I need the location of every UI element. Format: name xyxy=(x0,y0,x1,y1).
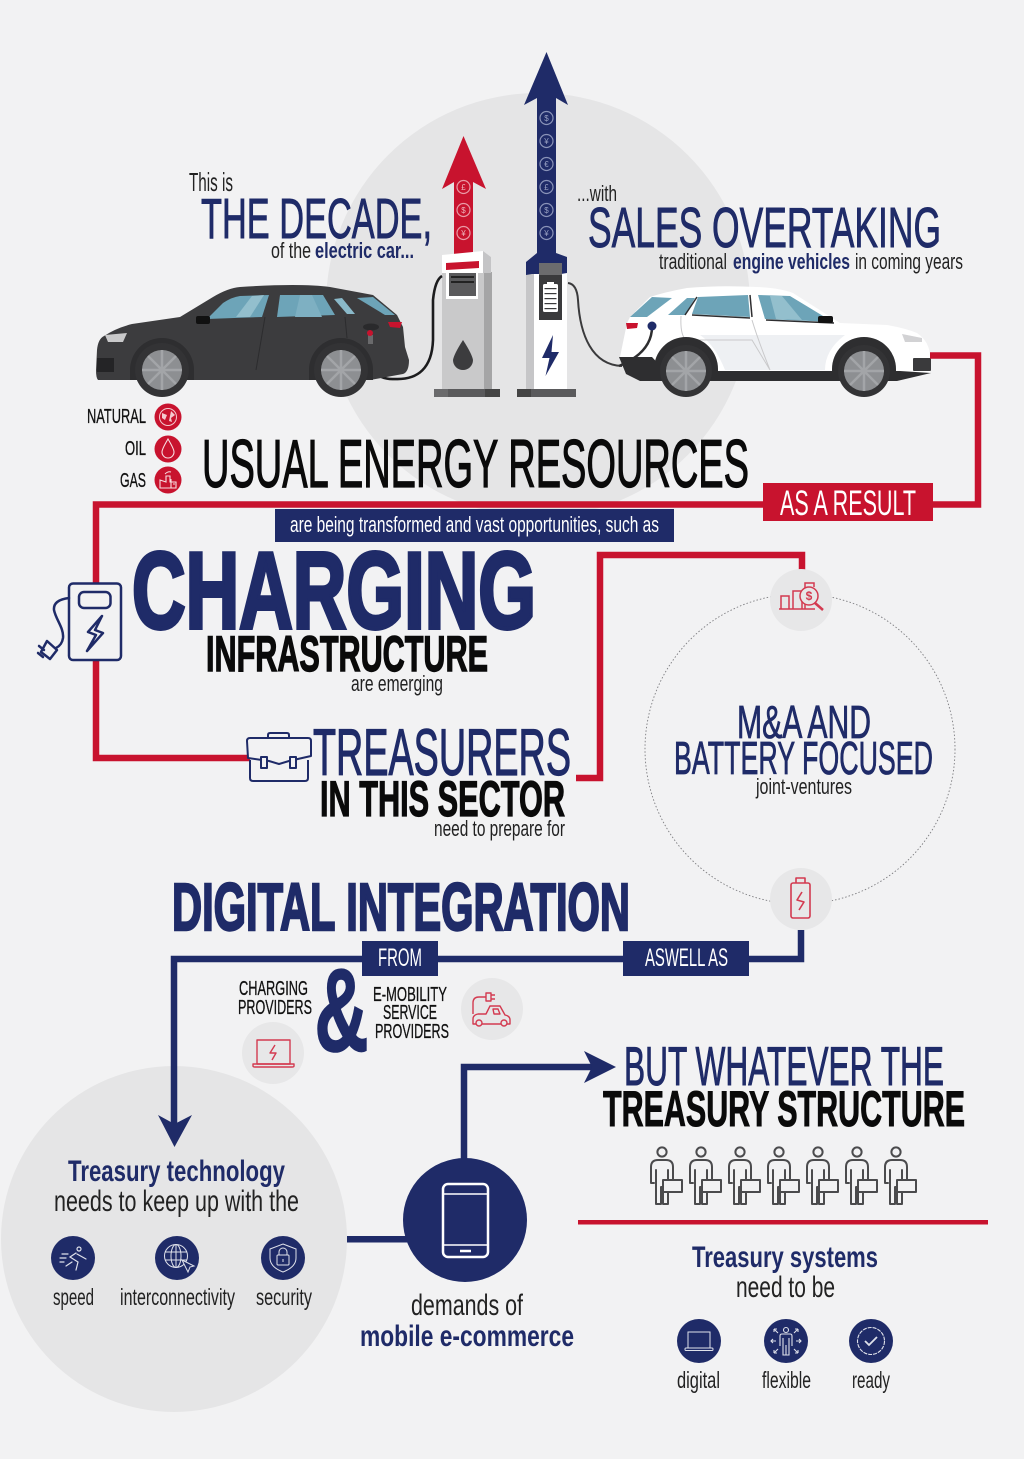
heading: charging infrastructure xyxy=(132,530,536,696)
navy arrow with coins: ¥ xyxy=(543,229,549,238)
icon: battery xyxy=(770,868,832,930)
icon: digital xyxy=(677,1319,721,1363)
text: charging providers: CHARGING xyxy=(239,978,308,1000)
charger cable, right xyxy=(568,283,622,366)
navy arrow with coins: £ xyxy=(544,183,549,192)
labels: technology attributes xyxy=(53,1284,312,1310)
text: mobile e-commerce: demands of xyxy=(411,1289,523,1322)
heading: treasurers in this sector: need to prepare for xyxy=(434,816,565,841)
heading: sales overtaking: ...with xyxy=(577,181,617,206)
pump cable, left xyxy=(369,276,442,379)
red arrow with coins: $ xyxy=(461,206,466,215)
icon: oil drop xyxy=(154,436,182,462)
heading: sales overtaking xyxy=(577,181,963,274)
heading: the decade: THE DECADE, xyxy=(201,187,432,251)
red connector line, middle xyxy=(576,555,802,778)
heading: the decade xyxy=(189,167,432,263)
heading: sales overtaking: engine vehicles xyxy=(733,249,850,274)
text: e-mobility service providers: SERVICE xyxy=(383,1002,437,1024)
navy arrow with coins: € xyxy=(544,160,549,169)
icon row: treasury people xyxy=(651,1147,916,1204)
label: as well as: ASWELL AS xyxy=(645,944,728,972)
labels: technology attributes: speed xyxy=(53,1284,94,1310)
labels: system attributes: flexible xyxy=(762,1367,811,1393)
banner: being transformed: are being transformed and vast opportunities, such as xyxy=(290,512,659,537)
navy connector to treasury structure xyxy=(464,1051,616,1165)
label: from xyxy=(362,941,438,976)
icon: gas plant xyxy=(154,466,182,494)
panel: treasury technology xyxy=(1,1066,347,1412)
icon: m&a search: $ xyxy=(806,589,813,603)
red arrow with coins: £ xyxy=(461,183,466,192)
heading: treasury technology: needs to keep up with the xyxy=(54,1185,299,1218)
heading: sales overtaking: in coming years xyxy=(855,249,963,274)
labels: system attributes: digital xyxy=(677,1367,720,1393)
dark car xyxy=(96,285,409,397)
energy resource list: NATURAL xyxy=(87,406,146,428)
energy resource list xyxy=(87,404,182,494)
text: m&a and battery focused: joint-ventures xyxy=(755,774,852,799)
label: as well as xyxy=(623,941,749,976)
heading: sales overtaking: traditional xyxy=(659,249,727,274)
label: as a result: AS A RESULT xyxy=(780,484,916,523)
text: e-mobility service providers: E-MOBILITY xyxy=(373,984,447,1006)
heading: charging infrastructure: are emerging xyxy=(351,671,443,696)
label: as a result xyxy=(763,483,933,523)
text: charging providers: PROVIDERS xyxy=(238,997,312,1019)
heading: the decade: of the xyxy=(271,238,311,263)
heading: charging infrastructure: CHARGING xyxy=(132,530,536,652)
heading: treasury technology xyxy=(54,1155,299,1218)
energy resource list: GAS xyxy=(120,470,146,492)
labels: technology attributes: interconnectivity xyxy=(120,1284,235,1310)
labels: system attributes xyxy=(677,1367,890,1393)
icon: charging station xyxy=(38,584,121,660)
labels: technology attributes: security xyxy=(256,1284,312,1310)
icon: ready xyxy=(849,1319,893,1363)
heading: treasury structure xyxy=(603,1035,965,1137)
heading: treasurers in this sector: TREASURERS xyxy=(313,715,571,789)
icon: flexible xyxy=(764,1319,808,1363)
navy arrow with coins: ¥ xyxy=(543,137,549,146)
label: from: FROM xyxy=(378,944,422,972)
text: e-mobility service providers xyxy=(373,984,449,1043)
red arrow with coins: ¥ xyxy=(460,229,466,238)
heading: treasury technology: Treasury technology xyxy=(68,1155,285,1188)
text: charging providers xyxy=(238,978,312,1019)
heading: charging infrastructure: INFRASTRUCTURE xyxy=(206,626,488,682)
icon: car with plug xyxy=(461,978,523,1040)
banner: being transformed xyxy=(275,509,674,542)
text: treasury systems xyxy=(692,1241,878,1304)
labels: system attributes: ready xyxy=(852,1367,890,1393)
petrol pump xyxy=(434,251,500,397)
heading: treasurers in this sector: IN THIS SECTOR xyxy=(320,771,565,827)
text: m&a and battery focused: M&A AND xyxy=(737,696,871,748)
heading: the decade: electric car... xyxy=(315,238,414,263)
connector between circles xyxy=(347,1236,410,1242)
text: treasury systems: Treasury systems xyxy=(692,1241,878,1274)
icon: laptop charging xyxy=(242,1022,304,1084)
white car xyxy=(619,286,931,397)
icon: m&a search xyxy=(770,569,832,631)
text: e-mobility service providers: PROVIDERS xyxy=(375,1021,449,1043)
ampersand: & xyxy=(314,945,368,1077)
top grey circle xyxy=(326,93,750,517)
text: m&a and battery focused xyxy=(674,696,933,799)
icon: interconnectivity xyxy=(155,1236,199,1280)
icon: mobile phone circle xyxy=(403,1158,527,1282)
icon: security xyxy=(261,1236,305,1280)
icon: globe xyxy=(154,404,182,430)
navy arrow with coins xyxy=(524,52,568,254)
red arrow with coins xyxy=(442,136,486,254)
text: mobile e-commerce: mobile e-commerce xyxy=(360,1320,574,1353)
energy resource list: OIL xyxy=(125,438,146,460)
electric charger xyxy=(517,253,576,397)
navy connector with arrow xyxy=(158,930,801,1147)
red connector line, top xyxy=(96,356,978,758)
navy arrow with coins: $ xyxy=(544,206,549,215)
navy arrow with coins: $ xyxy=(544,114,549,123)
dotted circle xyxy=(645,594,955,904)
red divider line xyxy=(578,1220,988,1224)
icon: speed xyxy=(51,1236,95,1280)
text: treasury systems: need to be xyxy=(736,1271,835,1304)
heading: digital integration: DIGITAL INTEGRATION xyxy=(172,870,630,945)
text: mobile e-commerce xyxy=(360,1289,574,1353)
icon: briefcase xyxy=(247,733,311,781)
heading: the decade: This is xyxy=(189,167,233,197)
heading: treasurers in this sector xyxy=(313,715,571,841)
